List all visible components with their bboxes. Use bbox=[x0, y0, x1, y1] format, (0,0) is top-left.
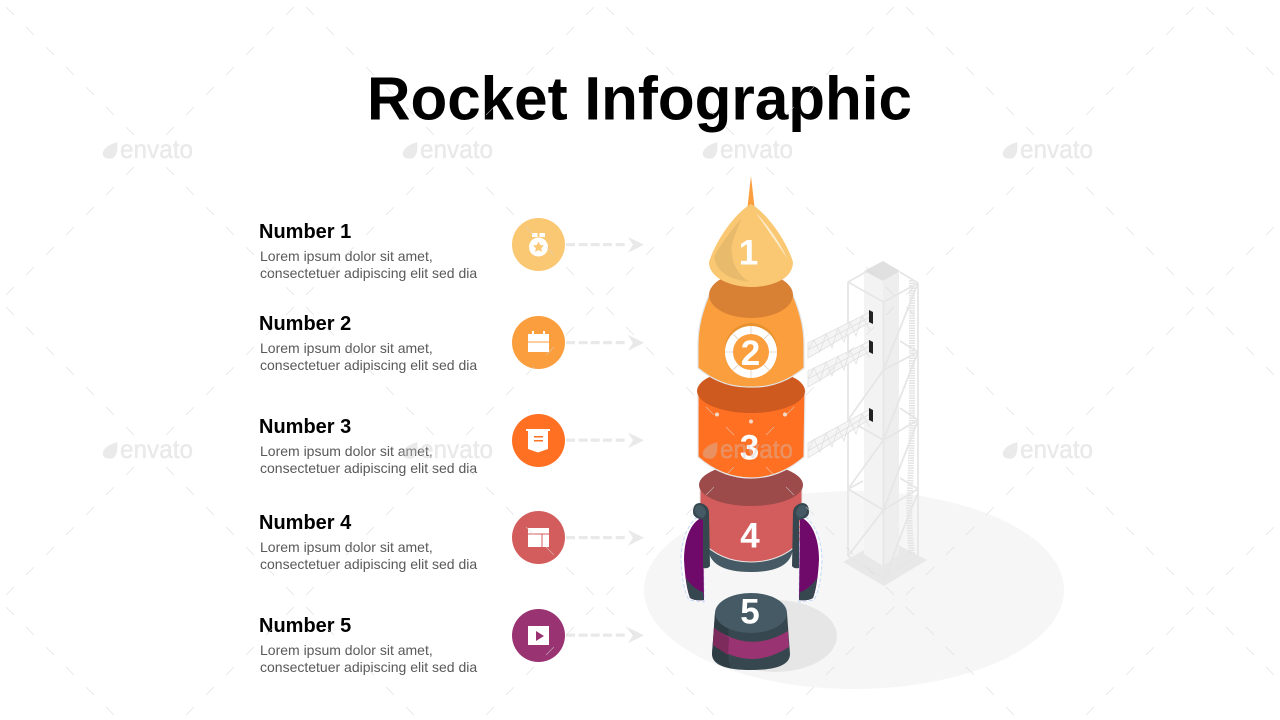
ground ellipse bbox=[644, 491, 1064, 689]
number 4: 4 bbox=[740, 516, 760, 556]
rocket shadow bbox=[713, 600, 837, 672]
text block 5: Number 5 bbox=[259, 615, 351, 637]
text block 4: Number 4 bbox=[259, 512, 352, 534]
right strut bbox=[792, 503, 809, 568]
watermark logos: envato bbox=[1020, 434, 1093, 464]
icon: badge bbox=[512, 414, 565, 467]
right fin bbox=[792, 503, 822, 602]
text block 5 bbox=[259, 615, 477, 675]
text block 3: Lorem ipsum dolor sit amet, bbox=[260, 443, 433, 459]
text block 2: Number 2 bbox=[259, 313, 351, 335]
text block 3 bbox=[259, 416, 477, 476]
arrow 5 bbox=[566, 628, 644, 643]
number 3: 3 bbox=[740, 428, 759, 468]
text block 2: Lorem ipsum dolor sit amet, bbox=[260, 340, 433, 356]
arrow 3 bbox=[566, 432, 644, 448]
gantry arm 1 bbox=[808, 312, 870, 358]
icon: calendar bbox=[512, 316, 565, 369]
text block 2: consectetuer adipiscing elit sed dia bbox=[260, 357, 477, 373]
number 1: 1 bbox=[739, 234, 758, 272]
watermark logos: envato bbox=[1020, 134, 1093, 164]
text block 1 bbox=[259, 221, 477, 281]
tower frame bbox=[848, 272, 918, 580]
number 5: 5 bbox=[740, 592, 760, 632]
watermark logos: envato bbox=[120, 134, 193, 164]
launch tower bbox=[843, 261, 927, 586]
left strut bbox=[693, 503, 710, 568]
watermark logos: envato bbox=[120, 434, 193, 464]
watermark logos: envato bbox=[420, 434, 493, 464]
gantry connectors bbox=[869, 310, 873, 422]
text block 3: Number 3 bbox=[259, 416, 351, 438]
tower ladder bbox=[909, 280, 912, 555]
text block 5: Lorem ipsum dolor sit amet, bbox=[260, 642, 433, 658]
text block 5: consectetuer adipiscing elit sed dia bbox=[260, 659, 477, 675]
text block 1: Lorem ipsum dolor sit amet, bbox=[260, 248, 433, 264]
gantry arm 3 bbox=[808, 409, 870, 458]
text block 1: Number 1 bbox=[259, 221, 351, 243]
rocket part 4: body bbox=[699, 464, 803, 572]
watermark logos: envato bbox=[420, 134, 493, 164]
rocket part 1: nose cone bbox=[709, 176, 793, 287]
gantry arm 2 bbox=[808, 341, 870, 387]
rocket part 5: base bbox=[712, 592, 790, 670]
text block 1: consectetuer adipiscing elit sed dia bbox=[260, 265, 477, 281]
watermark logos: envato bbox=[720, 134, 793, 164]
text block 4: Lorem ipsum dolor sit amet, bbox=[260, 539, 433, 555]
watermark logos bbox=[103, 134, 1093, 464]
tower base bbox=[843, 538, 927, 586]
arrow 1 bbox=[566, 237, 644, 253]
text block 2 bbox=[259, 313, 477, 373]
icon: play bbox=[512, 609, 565, 662]
tower core bbox=[864, 261, 900, 566]
rocket part 2: capsule bbox=[698, 272, 804, 387]
icon: layout bbox=[512, 511, 565, 564]
number 2: 2 bbox=[741, 334, 760, 373]
icon: medal bbox=[512, 218, 565, 271]
text block 3: consectetuer adipiscing elit sed dia bbox=[260, 460, 477, 476]
left fin bbox=[681, 503, 710, 602]
arrow 4 bbox=[566, 530, 644, 546]
rivets bbox=[715, 412, 787, 424]
text block 4: consectetuer adipiscing elit sed dia bbox=[260, 556, 477, 572]
text block 4 bbox=[259, 512, 477, 572]
title: Rocket Infographic bbox=[367, 64, 912, 132]
rocket part 3: orange section bbox=[697, 369, 805, 478]
arrow 2 bbox=[566, 335, 644, 351]
watermark logos: envato bbox=[720, 434, 793, 464]
